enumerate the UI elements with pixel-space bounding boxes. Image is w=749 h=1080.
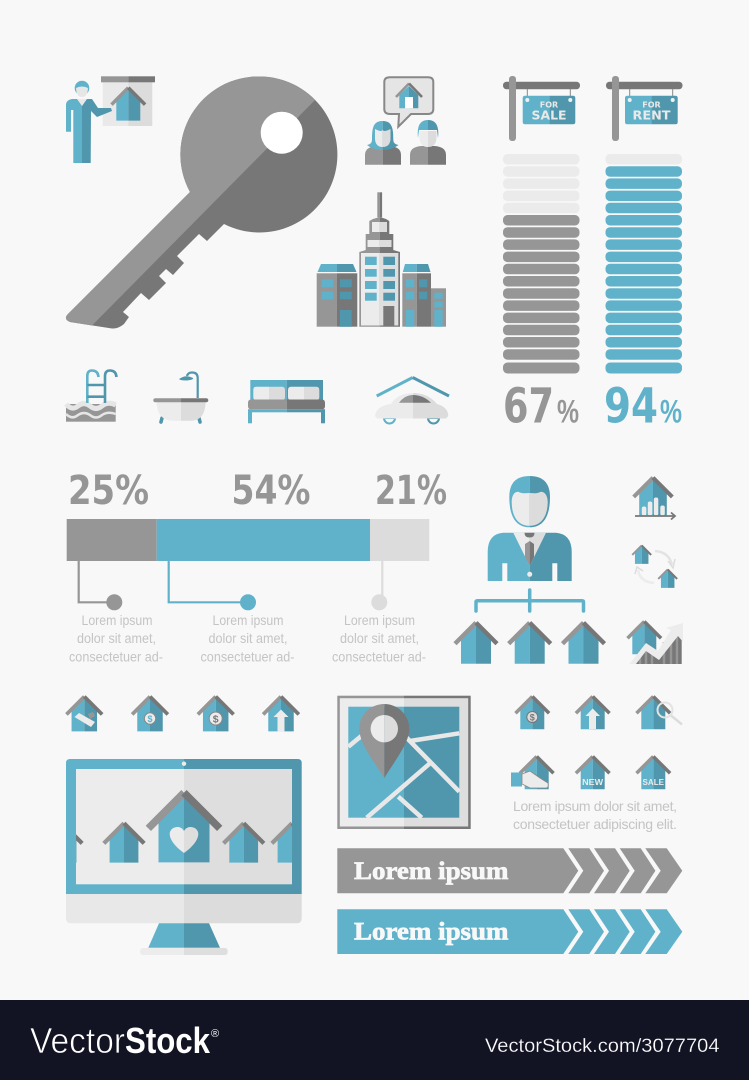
text block: blue segment [200,612,295,664]
icon: for sale sign: FOR [540,100,558,110]
icon: exchange houses cycle [632,545,677,588]
value: 94%: % [660,394,682,430]
text block: blue segment: Lorem ipsum [212,612,284,628]
icon: car in garage [375,378,449,424]
value: 94%: 94 [604,378,658,434]
icon: for rent sign: FOR [642,100,661,110]
icon: agent businessman [488,476,572,581]
value: 67%: % [557,394,579,430]
text block: gray segment: dolor sit amet, [77,630,156,646]
text block: light segment: consectetuer ad- [332,648,426,664]
bar gauge: for sale 67% [503,154,580,374]
icon: house left [455,623,497,664]
stacked bar value labels: 21% [375,468,447,514]
text block: light segment [332,612,426,664]
text block: gray segment: consectetuer ad- [69,648,163,664]
icon: house dollar large coin: $ [213,714,219,726]
icon: bathtub with shower [153,372,208,422]
arrow banner: gray [337,848,682,893]
icon: small house dollar: $ [530,712,535,722]
icon: city buildings [317,192,446,327]
icon: house with bar chart [634,478,675,520]
stacked bar chart [67,519,429,561]
icon: desktop monitor with houses [66,759,302,955]
icon: new house [576,756,610,789]
footer logo: Vector [30,1020,125,1061]
icon: small house magnifier [636,696,682,729]
connector: light segment [371,561,387,610]
text block: gray segment [69,612,163,664]
stacked bar value labels [68,468,447,514]
arrow banner: gray: Lorem ipsum [354,858,509,885]
icon: small house up arrow [576,696,610,729]
icon: house up arrow [263,697,299,732]
bar gauge: for rent 94% [606,154,682,374]
icon: for sale sign: SALE [532,108,566,122]
text block: gray segment: Lorem ipsum [82,612,152,628]
text block: blue segment: dolor sit amet, [208,630,288,646]
icon: house handshake [66,697,102,731]
stacked bar value labels: 54% [232,468,310,514]
icon: house dollar [132,697,168,731]
connector: blue segment [169,561,256,610]
icon: hand holding house [511,756,554,789]
text block: icon caption [513,798,677,832]
text block: icon caption: consectetuer adipiscing elit. [513,816,677,832]
footer logo: Stock [125,1020,211,1061]
icon: small house dollar [516,696,549,729]
icon: for rent sign: RENT [632,108,671,122]
icon: sale house [636,756,670,789]
icon: two people with speech bubble [365,77,446,165]
icon: house right [562,623,604,664]
icon: swimming pool [66,370,116,422]
icon: sale house: SALE [643,778,665,787]
footer url: VectorStock.com/3077704 [485,1036,720,1057]
text block: light segment: dolor sit amet, [340,630,419,646]
icon: new house: NEW [582,778,604,787]
footer bar [0,1000,749,1080]
icon: for rent sign [606,76,682,141]
footer logo [30,1020,219,1061]
text block: icon caption: Lorem ipsum dolor sit amet, [513,798,677,814]
arrow banner: blue [337,909,682,954]
icon: house center [509,623,551,664]
connector: gray segment [79,561,122,610]
text block: light segment: Lorem ipsum [344,612,415,628]
icon: for sale sign [503,76,580,141]
org chart connector [476,590,584,611]
icon: double bed [248,380,325,423]
icon: presenter with house board [66,76,155,163]
value: 67%: 67 [503,378,554,434]
icon: house price growth chart [628,622,683,664]
arrow banner: blue: Lorem ipsum [354,918,509,945]
icon: house dollar: $ [147,714,153,724]
icon: map with location pin [337,696,471,829]
icon: house dollar large coin [198,697,234,731]
icon: large key [66,76,337,329]
stacked bar value labels: 25% [68,468,149,514]
footer logo: ® [211,1028,219,1040]
text block: blue segment: consectetuer ad- [200,648,295,664]
